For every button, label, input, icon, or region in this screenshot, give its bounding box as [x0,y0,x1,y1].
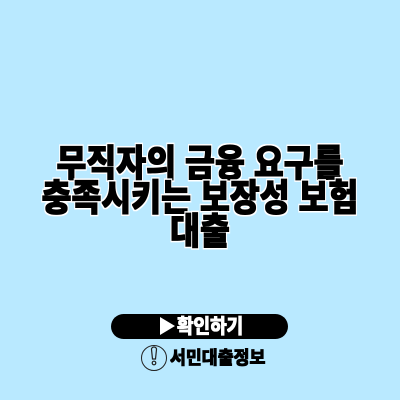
title [42,144,358,252]
title: 충족시키는 보장성 보험 [42,179,358,219]
title: 대출 [170,212,230,252]
button label: 확인하기 [177,315,243,338]
title: 무직자의 금융 요구를 [57,144,343,184]
button: confirm [111,314,288,339]
source name: 서민대출정보 [170,348,265,368]
icon: exclamation circle [142,346,166,370]
source badge [142,346,265,370]
icon: play triangle [160,317,175,335]
